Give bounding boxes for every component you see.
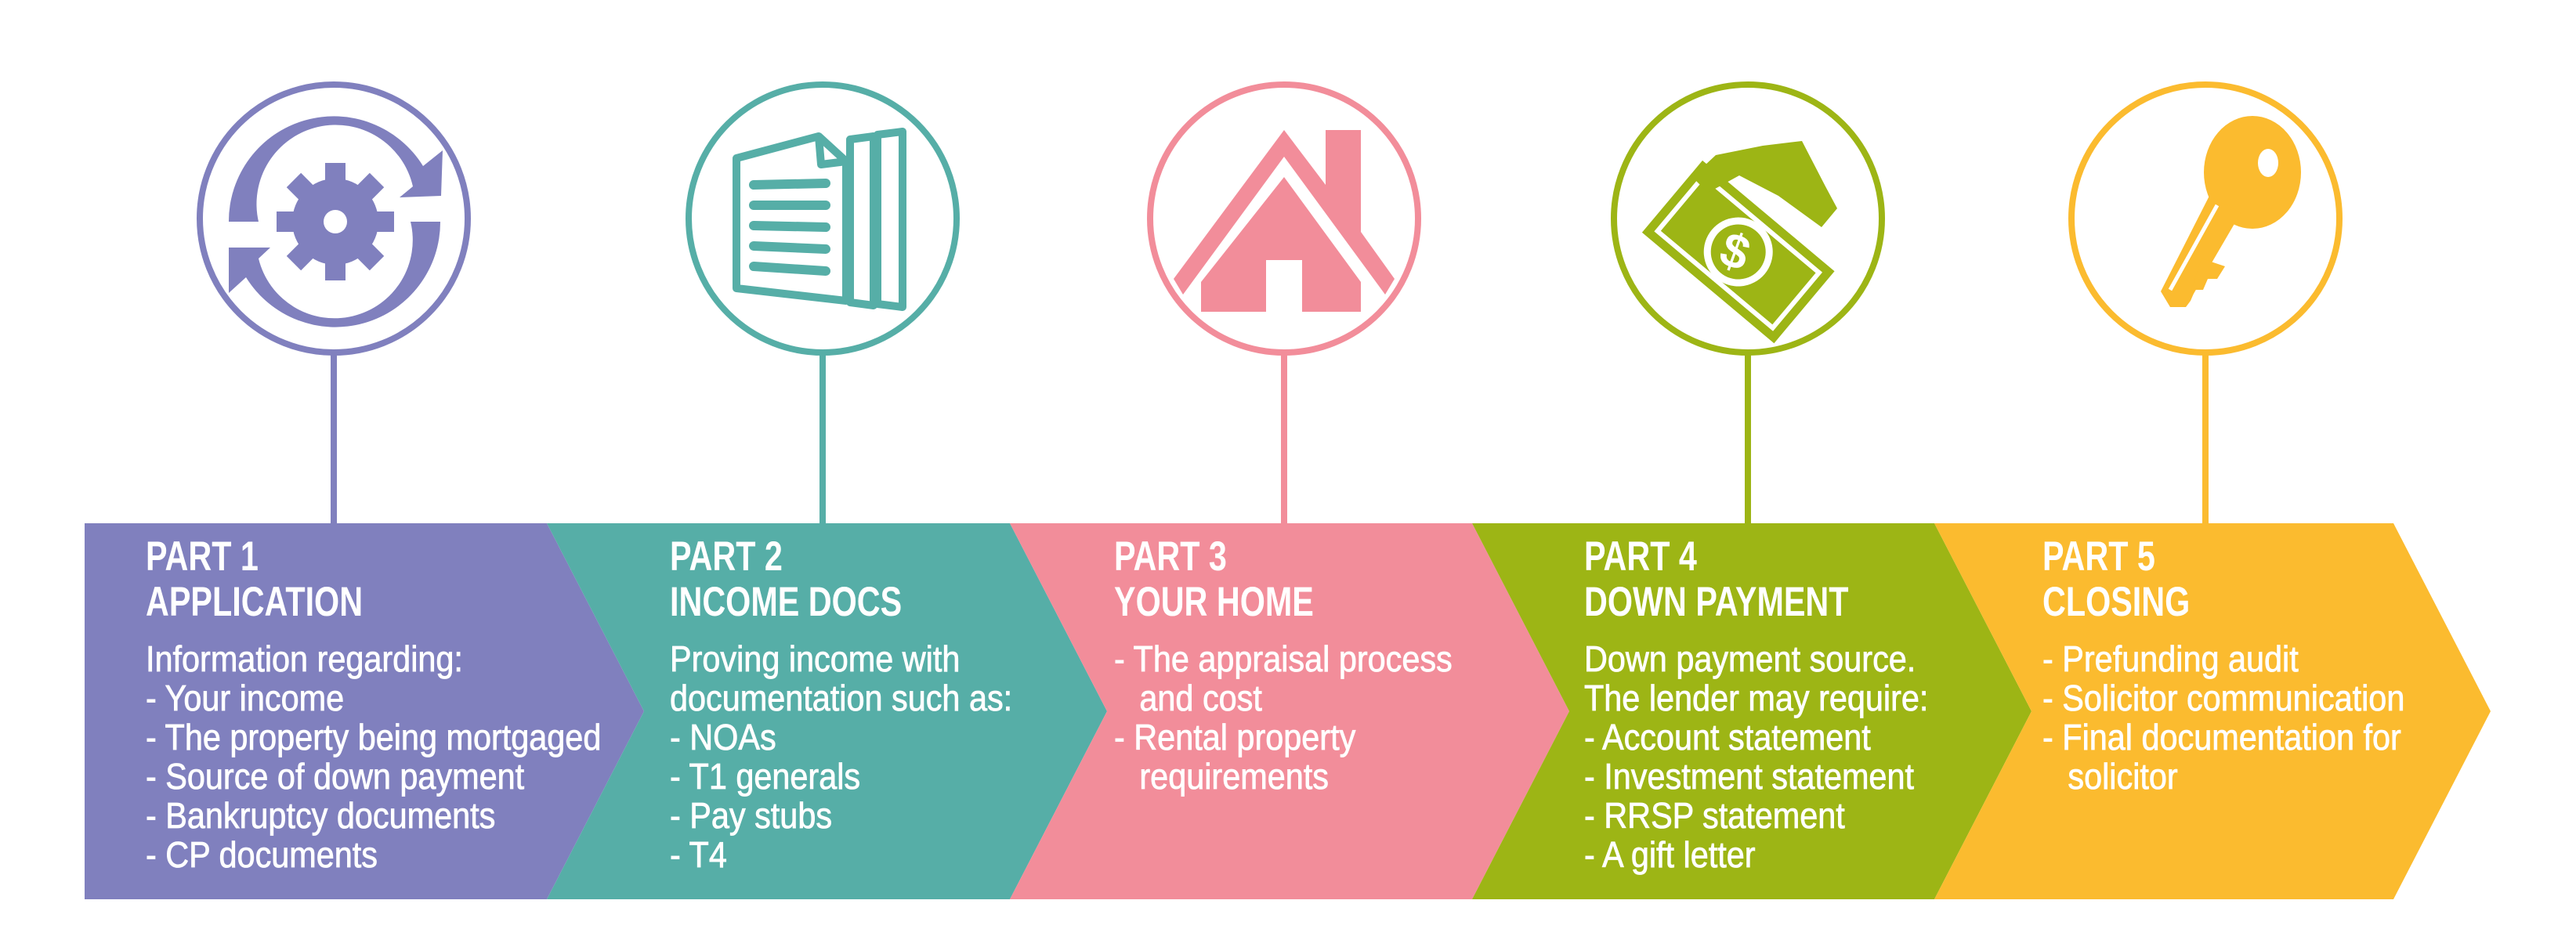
text 5: - Solicitor communication xyxy=(2042,678,2404,719)
text 4: PART 4 xyxy=(1584,533,1697,580)
text 4: - RRSP statement xyxy=(1584,796,1845,837)
text 1: - Source of down payment xyxy=(146,757,524,797)
text 2: - T4 xyxy=(670,835,727,876)
text 1: Information regarding: xyxy=(146,639,463,680)
text 2: INCOME DOCS xyxy=(670,579,902,625)
icon: gear with circular arrows xyxy=(229,116,443,327)
text 5 xyxy=(2042,533,2404,797)
step 2: income docs xyxy=(547,85,1107,899)
text 3: PART 3 xyxy=(1114,533,1227,580)
text 5: solicitor xyxy=(2068,757,2178,797)
text 3: requirements xyxy=(1139,757,1329,797)
text 4: - Investment statement xyxy=(1584,757,1914,797)
text 1: APPLICATION xyxy=(146,579,363,625)
icon: documents xyxy=(736,132,903,307)
circle 2 with stem xyxy=(689,85,957,523)
text 1: - The property being mortgaged xyxy=(146,718,601,758)
text 2 xyxy=(670,533,1012,876)
text 2: - T1 generals xyxy=(670,757,860,797)
text 4: - A gift letter xyxy=(1584,835,1756,876)
text 2: Proving income with xyxy=(670,639,960,680)
text 3: - The appraisal process xyxy=(1114,639,1453,680)
text 1 xyxy=(146,533,601,876)
text 2: documentation such as: xyxy=(670,678,1012,719)
text 5: - Final documentation for xyxy=(2042,718,2401,758)
chevron 3 xyxy=(1010,523,1569,899)
text 5: - Prefunding audit xyxy=(2042,639,2299,680)
circle 3 with stem xyxy=(1150,85,1418,523)
text 2: PART 2 xyxy=(670,533,783,580)
text 3: YOUR HOME xyxy=(1114,579,1314,625)
text 2: - NOAs xyxy=(670,718,776,758)
text 3: - Rental property xyxy=(1114,718,1355,758)
chevron 1 xyxy=(85,523,644,899)
icon: house xyxy=(1174,130,1395,312)
text 3 xyxy=(1114,533,1453,797)
text 2: - Pay stubs xyxy=(670,796,832,837)
circle 5 with stem xyxy=(2071,85,2339,523)
icon: key xyxy=(2161,116,2301,307)
text 4: DOWN PAYMENT xyxy=(1584,579,1849,625)
text 1: - CP documents xyxy=(146,835,378,876)
circle 4 with stem xyxy=(1614,85,1882,523)
step 5: closing xyxy=(1934,85,2491,899)
text 1: - Bankruptcy documents xyxy=(146,796,495,837)
text 4 xyxy=(1584,533,1928,876)
icon: money in hand xyxy=(1642,141,1837,343)
step 1: application xyxy=(85,85,644,899)
text 5: PART 5 xyxy=(2042,533,2155,580)
chevron 4 xyxy=(1472,523,2031,899)
chevron 5 xyxy=(1934,523,2491,899)
text 4: Down payment source. xyxy=(1584,639,1916,680)
text 1: PART 1 xyxy=(146,533,259,580)
chevron 2 xyxy=(547,523,1107,899)
text 4: The lender may require: xyxy=(1584,678,1928,719)
text 1: - Your income xyxy=(146,678,344,719)
circle 1 with stem xyxy=(200,85,468,523)
text 4: - Account statement xyxy=(1584,718,1871,758)
text 5: CLOSING xyxy=(2042,579,2190,625)
step 3: your home xyxy=(1010,85,1569,899)
icon: money in hand: $ xyxy=(1713,222,1757,282)
step 4: down payment xyxy=(1472,85,2031,899)
text 3: and cost xyxy=(1139,678,1262,719)
